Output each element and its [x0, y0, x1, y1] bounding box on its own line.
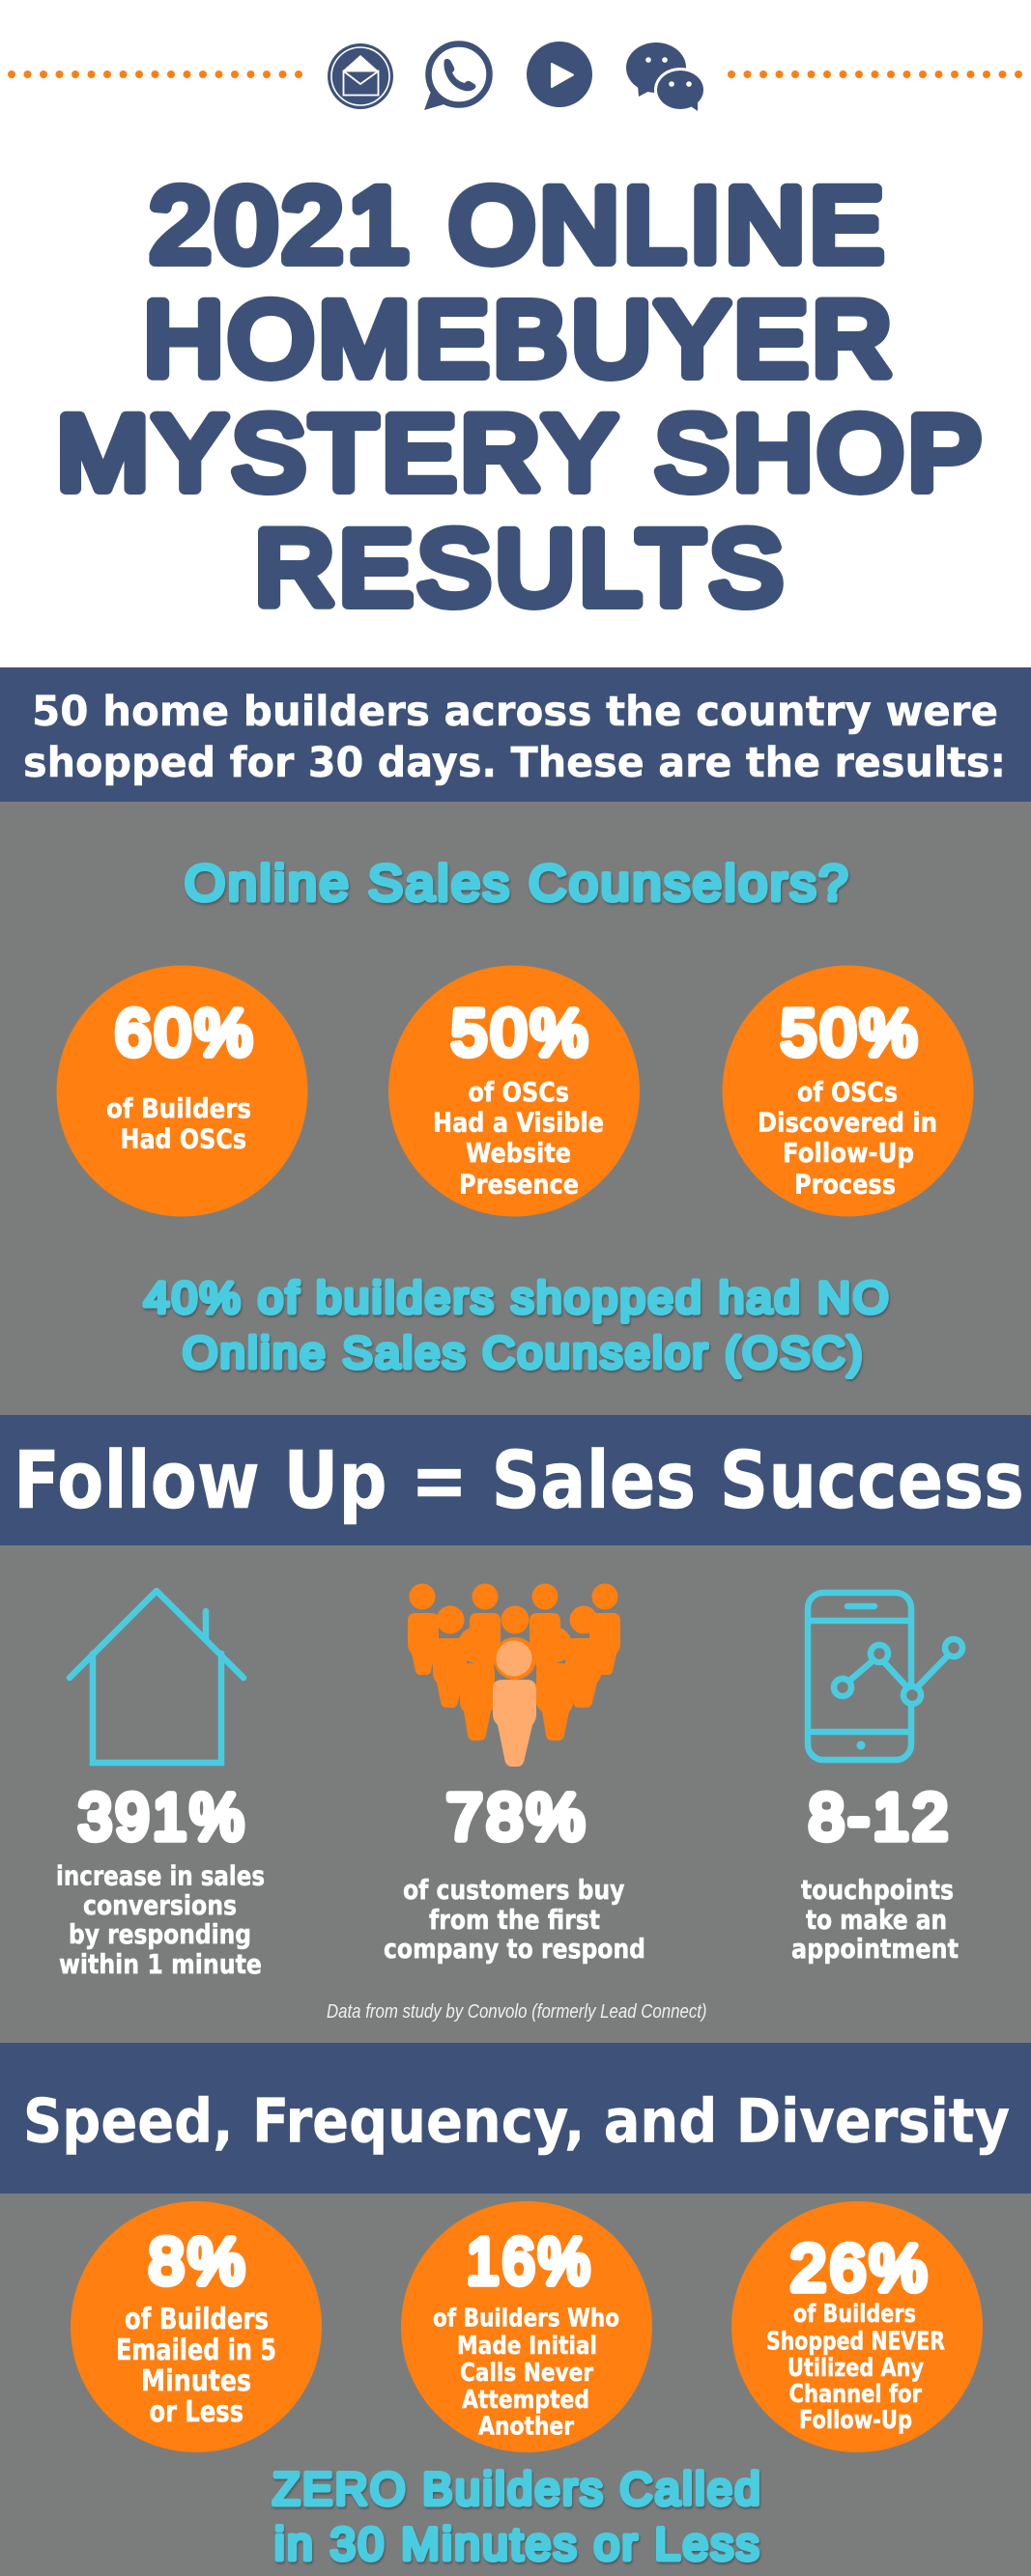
stat circle: 50% follow-up process: Discovered in: [758, 1107, 937, 1138]
stat circle: 8% emailed: 8%: [149, 2225, 248, 2298]
stat circle: 50% visible website presence: Had a Visible: [433, 1107, 604, 1138]
callout: 40% had no OSC: 40% of builders shopped had NO: [144, 1273, 891, 1322]
callout: 40% had no OSC: [144, 1273, 891, 1377]
banner: speed frequency diversity: [0, 2043, 1031, 2194]
stat: 78%: [384, 1781, 645, 1965]
stat circle: 50% follow-up process: [723, 966, 974, 1217]
callout: zero builders called: [272, 2463, 762, 2569]
grey section: follow up background: [0, 1545, 1031, 2044]
title: HOMEBUYER: [144, 280, 897, 397]
stat circle: 16% never attempted another: Another: [478, 2413, 574, 2442]
stat circle: 8% emailed: [71, 2201, 322, 2452]
icon: play button: [527, 42, 592, 107]
stat: 8-12: to make an: [806, 1904, 947, 1936]
banner: intro: shopped for 30 days. These are the results:: [23, 739, 1006, 787]
stat: 8-12: 8-12: [809, 1781, 952, 1854]
stat circle: 16% never attempted another: Made Initial: [457, 2332, 597, 2361]
stat circle: 16% never attempted another: [401, 2201, 652, 2452]
source note: Data from study by Convolo (formerly Lead Connect): [327, 2001, 707, 2023]
stat circle: 26% never utilized any channel: Follow-Up: [799, 2406, 912, 2435]
stat: 391%: 391%: [78, 1781, 247, 1854]
stat circle: 26% never utilized any channel: Utilized Any: [788, 2354, 924, 2383]
right dotted divider: [728, 71, 1022, 78]
stat circle: 50% follow-up process: Process: [794, 1169, 896, 1200]
stat circle: 50% follow-up process: Follow-Up: [783, 1137, 914, 1169]
title: [57, 166, 987, 626]
stat: 391%: [56, 1781, 265, 1980]
callout: zero builders called: ZERO Builders Called: [272, 2463, 762, 2514]
stat: 391%: by responding: [69, 1918, 251, 1950]
icon: smartphone with line chart: [808, 1593, 962, 1760]
stat circle: 50% visible website presence: Website: [466, 1137, 571, 1169]
stat circle: 50% follow-up process: of OSCs: [797, 1076, 898, 1108]
stat: 78%: from the first: [429, 1904, 600, 1936]
left dotted divider: [8, 71, 302, 78]
title: RESULTS: [255, 509, 788, 626]
stat circle: 50% visible website presence: 50%: [451, 997, 591, 1069]
stat circle: 8% emailed: of Builders: [125, 2303, 269, 2336]
title: MYSTERY SHOP: [57, 394, 987, 511]
banner: intro: 50 home builders across the country were: [32, 688, 998, 736]
stat circle: 50% visible website presence: of OSCs: [468, 1076, 569, 1108]
banner: intro: [0, 667, 1031, 802]
stat circle: 26% never utilized any channel: [731, 2201, 983, 2452]
stat: 391%: increase in sales: [56, 1860, 265, 1891]
stat circle: 60% of builders: [56, 966, 307, 1217]
icon: crowd of people: [408, 1584, 620, 1767]
icon: whatsapp: [424, 44, 489, 110]
stat: 391%: within 1 minute: [59, 1948, 262, 1980]
stat circle: 60% of builders: Had OSCs: [120, 1122, 246, 1155]
stat circle: 26% never utilized any channel: Shopped NEVER: [766, 2328, 945, 2357]
stat circle: 8% emailed: Minutes: [141, 2364, 251, 2398]
stat circle: 16% never attempted another: 16%: [467, 2225, 593, 2298]
stat circle: 8% emailed: Emailed in 5: [116, 2334, 276, 2367]
stat: 8-12: appointment: [791, 1933, 959, 1965]
stat: 78%: of customers buy: [403, 1874, 624, 1906]
callout: zero builders called: in 30 Minutes or Less: [274, 2518, 761, 2569]
callout: 40% had no OSC: Online Sales Counselor (OSC): [183, 1328, 865, 1377]
banner: follow up: [0, 1415, 1031, 1545]
stat circle: 26% never utilized any channel: 26%: [790, 2232, 931, 2305]
stat circle: 26% never utilized any channel: Channel for: [788, 2380, 922, 2409]
stat circle: 50% visible website presence: [388, 966, 640, 1217]
title: 2021 ONLINE: [150, 166, 888, 283]
stat: 391%: conversions: [83, 1889, 237, 1921]
grey section: online sales counselors background: [0, 802, 1031, 1416]
stat: 78%: company to respond: [384, 1933, 645, 1965]
stat circle: 16% never attempted another: Attempted: [462, 2386, 589, 2415]
stat circle: 60% of builders: of Builders: [106, 1092, 251, 1124]
stat circle: 16% never attempted another: of Builders Who: [433, 2305, 619, 2334]
stat circle: 50% visible website presence: Presence: [459, 1169, 579, 1200]
stat circle: 60% of builders: 60%: [115, 997, 256, 1069]
stat: 8-12: [791, 1781, 959, 1965]
icon: email: [328, 43, 393, 109]
heading: online sales counselors: Online Sales Counselors?: [185, 856, 850, 912]
front person: [493, 1640, 536, 1767]
stat: 8-12: touchpoints: [801, 1874, 954, 1906]
stat circle: 8% emailed: or Less: [149, 2395, 243, 2429]
grey section: speed frequency diversity background: [0, 2194, 1031, 2576]
stat circle: 26% never utilized any channel: of Builders: [793, 2300, 916, 2329]
icon: chat bubbles: [626, 42, 706, 112]
icon: house: [70, 1591, 243, 1763]
stat circle: 16% never attempted another: Calls Never: [460, 2359, 593, 2388]
stat: 78%: 78%: [446, 1781, 588, 1854]
stat circle: 50% follow-up process: 50%: [781, 997, 921, 1069]
